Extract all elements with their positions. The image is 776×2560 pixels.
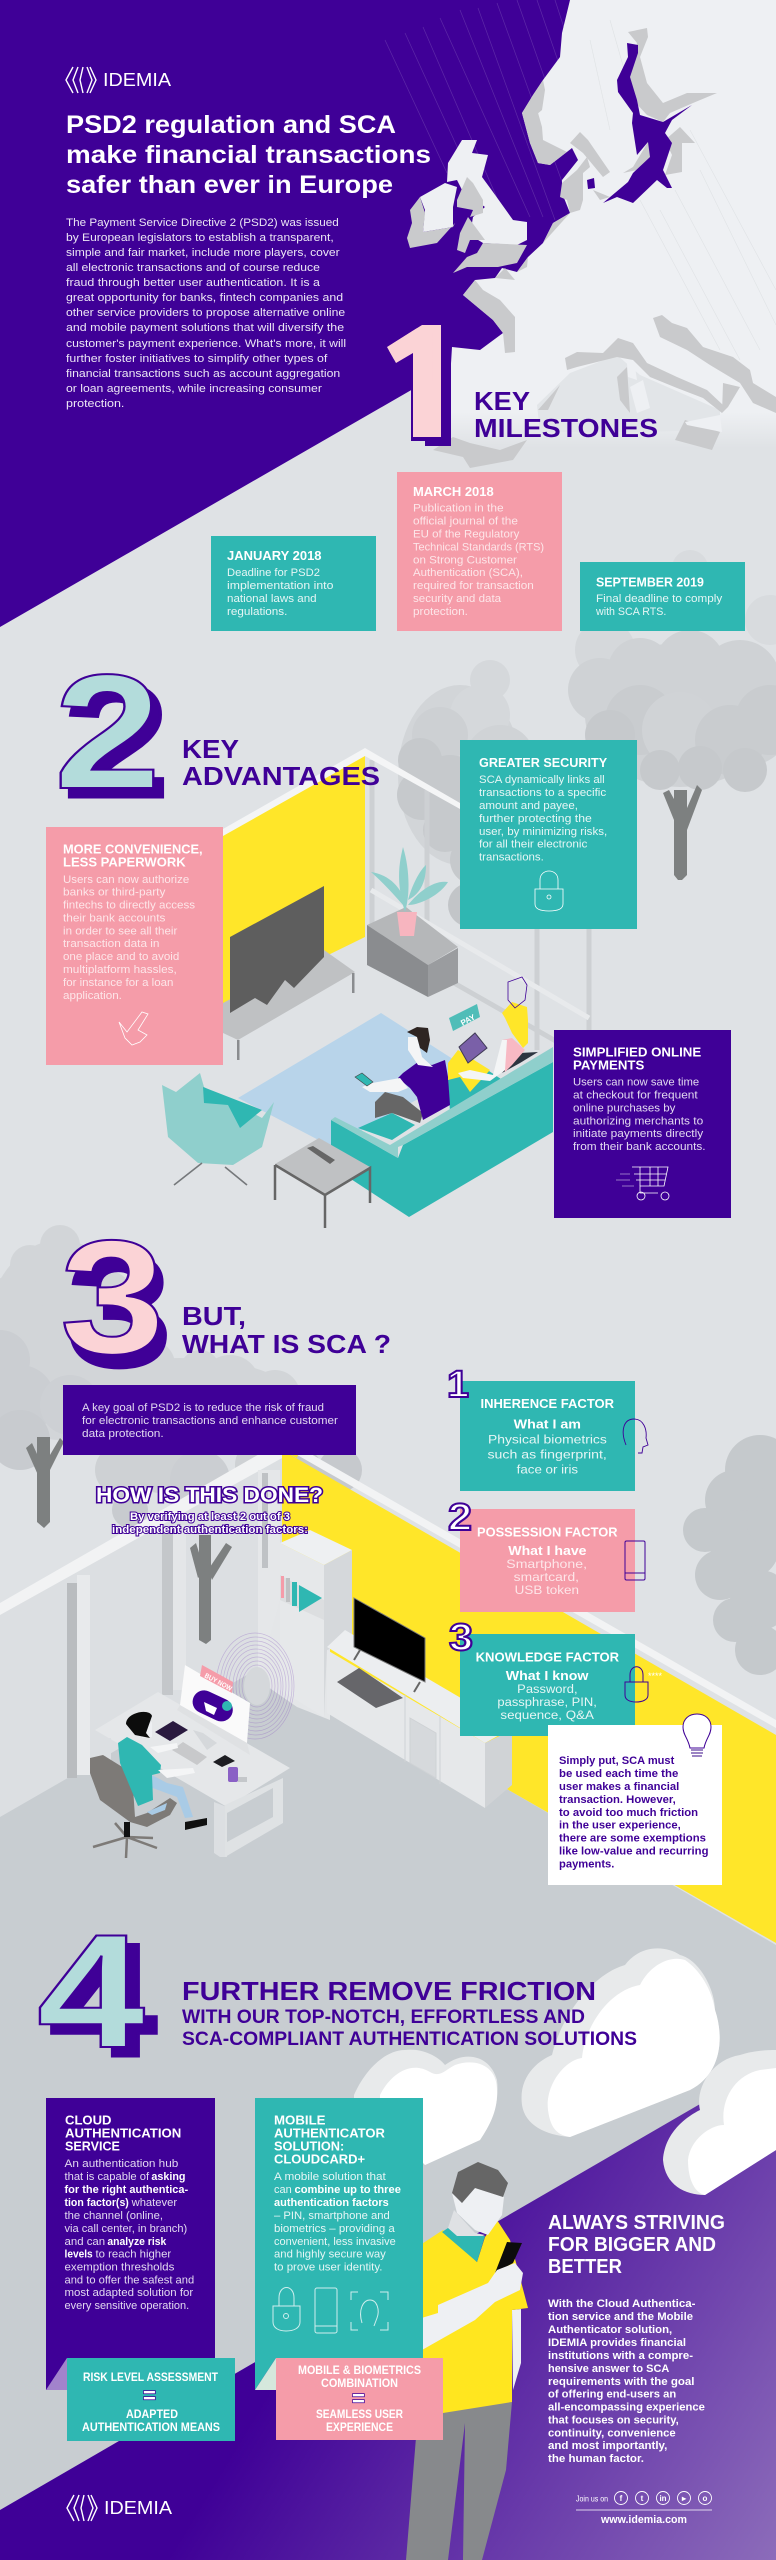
card: inherence factor xyxy=(447,1364,648,1491)
purple header background xyxy=(0,0,600,627)
intro text: further foster initiatives to simplify other types of xyxy=(66,353,328,365)
buy now tag: BUY NOW xyxy=(203,1673,233,1693)
card: september 2019: with SCA RTS. xyxy=(595,606,666,618)
card: simplified online payments: at checkout for frequent xyxy=(573,1090,698,1102)
illustration: living room xyxy=(162,748,589,1228)
icon: hand xyxy=(119,1012,148,1045)
card: january 2018: regulations. xyxy=(227,606,287,618)
heading: but what is SCA xyxy=(182,1301,391,1359)
person with phone xyxy=(400,2162,528,2560)
card: cloud authentication service: and to offer the safest and xyxy=(64,2274,194,2286)
box: mobile and biometrics: SEAMLESS USER xyxy=(316,2407,403,2421)
man at desk xyxy=(90,1712,207,1858)
heading: always striving: FOR BIGGER AND xyxy=(548,2233,716,2256)
card: march 2018: Authentication (SCA), xyxy=(413,567,523,579)
trees behind key advantages xyxy=(397,550,776,927)
section number 4: 4 xyxy=(49,1910,157,2091)
card: greater security xyxy=(460,740,637,929)
man on sofa xyxy=(355,1027,450,1123)
basket badge xyxy=(189,1687,237,1725)
shelf unit xyxy=(258,1530,352,1720)
card: simplified online payments: Users can now save time xyxy=(573,1076,699,1088)
title: make financial transactions xyxy=(66,141,431,169)
heading: key milestones: KEY xyxy=(474,386,530,416)
rug xyxy=(238,1013,470,1147)
card: january 2018: national laws and xyxy=(227,593,317,605)
heading: key milestones xyxy=(474,386,658,443)
side table xyxy=(275,1138,370,1228)
intro text: protection. xyxy=(66,398,124,410)
card: simplified online payments: initiate payments directly xyxy=(573,1128,704,1140)
card: greater security: SCA dynamically links all xyxy=(479,774,605,786)
box: mobile and biometrics: = xyxy=(352,2386,365,2411)
social links: www.idemia.com xyxy=(600,2514,687,2526)
closing text: and most importantly, xyxy=(548,2440,667,2452)
floor xyxy=(0,1657,776,2560)
card: more convenience: LESS PAPERWORK xyxy=(63,856,186,870)
text box: key goal: A key goal of PSD2 is to reduce the risk of fraud xyxy=(82,1402,324,1414)
icon: light bulb xyxy=(683,1714,711,1756)
card: inherence factor: face or iris xyxy=(517,1462,578,1476)
intro text: all electronic transactions and of course reduce xyxy=(66,262,320,274)
card: simplified online payments: online purchases by xyxy=(573,1102,676,1114)
card: cloud authentication service: CLOUD xyxy=(65,2114,112,2128)
card: march 2018 xyxy=(397,472,562,631)
social links: f xyxy=(620,2494,623,2503)
card: mobile authenticator solution: combine up to three xyxy=(294,2184,401,2196)
heading: but what is SCA: BUT, xyxy=(182,1301,246,1331)
yellow wall xyxy=(282,1450,776,1943)
woman on sofa xyxy=(448,1002,538,1092)
card: more convenience: banks or third-party xyxy=(63,887,166,899)
text box: key goal: for electronic transactions and enhance customer xyxy=(82,1415,338,1427)
card: january 2018 xyxy=(211,536,376,631)
card: knowledge factor: Password, xyxy=(517,1682,578,1696)
callout: simply put: Simply put, SCA must xyxy=(559,1755,675,1767)
callout: simply put: there are some exemptions xyxy=(559,1832,706,1844)
card: more convenience: multiplatform hassles, xyxy=(63,964,177,976)
heading: further remove friction xyxy=(182,1976,637,2050)
heading: how is this done: HOW IS THIS DONE? xyxy=(96,1484,323,1507)
card: cloud authentication service: An authentication hub xyxy=(64,2158,178,2170)
tv xyxy=(230,886,324,1013)
box: mobile and biometrics xyxy=(276,2358,443,2440)
card: cloud authentication service: AUTHENTICATION xyxy=(65,2126,181,2140)
card: cloud authentication service: tion factor(s) xyxy=(64,2197,129,2209)
text box: key goal xyxy=(63,1385,356,1455)
card: cloud authentication service: levels xyxy=(64,2248,93,2260)
intro text: or loan agreements, while increasing consumer xyxy=(66,383,322,395)
card: greater security: for all their electronic xyxy=(479,838,588,850)
closing text: all-encompassing experience xyxy=(548,2402,705,2414)
digit 1: 1 xyxy=(447,1364,469,1406)
icon: phone xyxy=(625,1541,645,1580)
intro text xyxy=(66,217,346,410)
icon: padlock with stars: **** xyxy=(648,1671,663,1681)
intro text: simple and fair market, include more players, cover xyxy=(66,247,340,259)
social links: t xyxy=(641,2494,644,2503)
card: knowledge factor: KNOWLEDGE FACTOR xyxy=(476,1650,619,1664)
card: cloud authentication service: SERVICE xyxy=(65,2140,120,2154)
card: more convenience: MORE CONVENIENCE, xyxy=(63,843,203,857)
card: mobile authenticator solution: A mobile solution that xyxy=(274,2171,386,2183)
digit 2: 2 xyxy=(448,1497,472,1539)
icons: lock, phone, face xyxy=(273,2288,388,2333)
heading: always striving: BETTER xyxy=(548,2255,622,2278)
heading: key advantages: KEY xyxy=(182,734,239,764)
card: january 2018: Deadline for PSD2 xyxy=(227,567,320,579)
card: more convenience: in order to see all their xyxy=(63,926,178,938)
card: simplified online payments xyxy=(554,1030,731,1218)
card: cloud authentication service: most adapted solution for xyxy=(64,2287,194,2299)
card: more convenience xyxy=(46,827,223,1065)
closing text: continuity, convenience xyxy=(548,2428,676,2440)
callout: simply put: to avoid too much friction xyxy=(559,1807,698,1819)
card: cloud authentication service: to reach higher xyxy=(96,2248,172,2260)
cabinet and plant xyxy=(367,847,458,997)
card: mobile authenticator solution: biometrics – providing a xyxy=(274,2223,395,2235)
closing text: tion service and the Mobile xyxy=(548,2311,693,2323)
intro text: The Payment Service Directive 2 (PSD2) was issued xyxy=(66,217,339,229)
heading: key advantages xyxy=(182,734,380,791)
heading: but what is SCA: WHAT IS SCA ? xyxy=(182,1329,391,1359)
callout: simply put: transaction. However, xyxy=(559,1794,676,1806)
callout: simply put: in the user experience, xyxy=(559,1820,681,1832)
card: simplified online payments: authorizing merchants to xyxy=(573,1116,703,1128)
title: PSD2 regulation and SCA xyxy=(66,111,396,139)
card: inherence factor: INHERENCE FACTOR xyxy=(480,1397,614,1411)
card: cloud authentication service: every sensitive operation. xyxy=(64,2300,189,2312)
card: january 2018: implementation into xyxy=(227,580,333,592)
social links: ▸ xyxy=(681,2494,687,2503)
card: september 2019: SEPTEMBER 2019 xyxy=(596,575,704,589)
section number 3: 3 xyxy=(60,1207,165,1388)
heading: key milestones: MILESTONES xyxy=(474,413,658,443)
card: more convenience: fintechs to directly access xyxy=(63,900,196,912)
card: march 2018: protection. xyxy=(413,606,468,618)
intro text: other service providers to propose alternative online xyxy=(66,307,345,319)
card: cloud authentication service: via call center, in branch) xyxy=(64,2223,187,2235)
title: safer than ever in Europe xyxy=(66,171,393,199)
card: cloud authentication service: asking xyxy=(151,2171,186,2183)
card: cloud authentication service xyxy=(46,2098,215,2390)
icon: padlock with stars xyxy=(625,1667,663,1702)
card: greater security: GREATER SECURITY xyxy=(479,756,608,770)
callout: simply put: payments. xyxy=(559,1858,614,1870)
buy now tag xyxy=(200,1665,233,1693)
card: greater security: user, by minimizing risks, xyxy=(479,826,607,838)
card: knowledge factor: passphrase, PIN, xyxy=(497,1695,597,1709)
card: cloud authentication service: the channel (online, xyxy=(64,2210,163,2222)
heading: how is this done: By verifying at least 2 out of 3 xyxy=(130,1511,290,1523)
card: greater security: amount and payee, xyxy=(479,800,578,812)
card: possession factor: POSSESSION FACTOR xyxy=(477,1526,618,1540)
armchair xyxy=(162,1073,274,1185)
heading: how is this done xyxy=(96,1484,323,1536)
card: mobile authenticator solution: SOLUTION: xyxy=(274,2140,344,2154)
desk xyxy=(95,1665,290,1857)
pay tag xyxy=(449,1004,480,1031)
card: mobile authenticator solution: convenient, less invasive xyxy=(274,2236,396,2248)
card: cloud authentication service: for the right authentica- xyxy=(64,2184,189,2196)
closing text: IDEMIA provides financial xyxy=(548,2337,686,2349)
section number 1 xyxy=(387,325,451,446)
digit 3: 3 xyxy=(449,1617,473,1659)
logo: IDEMIA top: IDEMIA xyxy=(103,70,171,90)
social links: in xyxy=(659,2494,667,2503)
intro text: great opportunity for banks, fintech companies and xyxy=(66,292,343,304)
right trees xyxy=(683,1435,776,1675)
card: cloud authentication service: analyze risk xyxy=(107,2236,167,2248)
card: mobile authenticator solution: AUTHENTICATOR xyxy=(274,2126,385,2140)
intro text: by European legislators to establish a transparent, xyxy=(66,232,334,244)
illustration: office room xyxy=(0,1364,776,2560)
closing text: requirements with the goal xyxy=(548,2376,694,2388)
logo: IDEMIA bottom: IDEMIA xyxy=(104,2498,172,2518)
card: simplified online payments: PAYMENTS xyxy=(573,1059,644,1073)
card: march 2018: official journal of the xyxy=(413,516,518,528)
med sea tint xyxy=(537,355,720,432)
card: knowledge factor xyxy=(449,1617,635,1736)
card: more convenience: one place and to avoid xyxy=(63,951,179,963)
monitor xyxy=(177,1705,250,1755)
closing text: institutions with a compre- xyxy=(548,2350,693,2362)
section number 4: 4 xyxy=(37,1901,145,2082)
card: possession factor: USB token xyxy=(515,1583,579,1597)
text box: key goal: data protection. xyxy=(82,1428,164,1440)
card: march 2018: Publication in the xyxy=(413,502,504,514)
card: more convenience: transaction data in xyxy=(63,938,160,950)
card: march 2018: on Strong Customer xyxy=(413,554,517,566)
intro text: fraud through better user authentication. It is a xyxy=(66,277,321,289)
card: mobile authenticator solution: can xyxy=(274,2184,292,2196)
tv bench xyxy=(223,950,355,1060)
window frames and tree xyxy=(67,1470,280,1778)
section number 1: 1 xyxy=(378,295,466,471)
box: risk level assessment xyxy=(67,2358,235,2441)
box: risk level assessment: ADAPTED xyxy=(126,2407,178,2421)
card: cloud authentication service: that is capable of xyxy=(64,2171,150,2183)
card: inherence factor: Physical biometrics xyxy=(488,1432,607,1446)
tv xyxy=(354,1598,425,1692)
card: simplified online payments: SIMPLIFIED ONLINE xyxy=(573,1046,701,1060)
left wall xyxy=(0,1445,282,1817)
card: march 2018: EU of the Regulatory xyxy=(413,528,520,540)
card: knowledge factor: sequence, Q&A xyxy=(500,1708,595,1722)
closing text: With the Cloud Authentica- xyxy=(548,2298,696,2310)
box: mobile and biometrics: MOBILE & BIOMETRICS xyxy=(298,2363,421,2377)
social links xyxy=(576,2492,712,2526)
closing text: of offering end-users an xyxy=(548,2388,676,2400)
closing text: Authenticator solution, xyxy=(548,2324,672,2336)
card: mobile authenticator solution: MOBILE xyxy=(274,2114,326,2128)
shield icon xyxy=(508,977,527,1008)
card: march 2018: Technical Standards (RTS) xyxy=(413,542,544,554)
icon: shopping cart xyxy=(616,1167,669,1200)
closing text: hensive answer to SCA xyxy=(548,2363,670,2375)
sofa xyxy=(331,1047,553,1217)
social links: Join us on xyxy=(576,2494,608,2504)
heading: further remove friction: WITH OUR TOP-NOTCH, EFFORTLESS AND xyxy=(182,2007,585,2028)
callout: simply put: like low-value and recurring xyxy=(559,1846,708,1858)
books xyxy=(281,1576,322,1612)
card: cloud authentication service: and can xyxy=(64,2236,105,2248)
closing text xyxy=(548,2298,705,2465)
card: mobile authenticator solution: to prove user identity. xyxy=(274,2262,382,2274)
clouds xyxy=(354,1948,776,2195)
card: possession factor: smartcard, xyxy=(514,1570,579,1584)
pay tag: PAY xyxy=(459,1012,477,1028)
box: risk level assessment: RISK LEVEL ASSESSMENT xyxy=(83,2370,219,2384)
card: greater security: further protecting the xyxy=(479,813,592,825)
card: march 2018: required for transaction xyxy=(413,580,534,592)
closing text: the human factor. xyxy=(548,2453,644,2465)
card: march 2018: MARCH 2018 xyxy=(413,485,494,499)
heading: how is this done: independent authentication factors: xyxy=(112,1524,308,1536)
card: more convenience: their bank accounts xyxy=(63,912,166,924)
card: simplified online payments: from their bank accounts. xyxy=(573,1141,706,1153)
purple footer background xyxy=(0,2060,776,2560)
card: more convenience: for instance for a loan xyxy=(63,977,173,989)
set-top box xyxy=(337,1668,403,1708)
closing text: that focuses on security, xyxy=(548,2414,679,2426)
card: september 2019 xyxy=(580,562,745,631)
callout: simply put: user makes a financial xyxy=(559,1781,679,1793)
fingerprint xyxy=(216,1633,294,1739)
card: greater security: transactions. xyxy=(479,852,544,864)
trees behind section 3 xyxy=(0,1225,362,1528)
heading: further remove friction: SCA-COMPLIANT AUTHENTICATION SOLUTIONS xyxy=(182,2029,637,2050)
card: mobile authenticator solution: – PIN, smartphone and xyxy=(274,2210,390,2222)
icon: head xyxy=(623,1419,648,1453)
card: september 2019: Final deadline to comply xyxy=(596,593,723,605)
heading: always striving: ALWAYS STRIVING xyxy=(548,2211,725,2234)
card: mobile authenticator solution: authentication factors xyxy=(274,2197,389,2209)
card: knowledge factor: What I know xyxy=(506,1668,589,1683)
title xyxy=(66,111,431,199)
intro text: financial transactions such as account aggregation xyxy=(66,368,340,380)
section number 3: 3 xyxy=(67,1220,172,1401)
logo: IDEMIA top xyxy=(66,67,171,93)
box: risk level assessment: = xyxy=(143,2383,156,2408)
intro text: customer's payment experience. What's more, it will xyxy=(66,338,346,350)
box: risk level assessment: AUTHENTICATION MEANS xyxy=(82,2420,220,2434)
card: january 2018: JANUARY 2018 xyxy=(227,549,322,563)
card: march 2018: security and data xyxy=(413,593,501,605)
callout: simply put xyxy=(548,1714,722,1885)
icon: padlock xyxy=(535,871,563,911)
section number 2: 2 xyxy=(63,649,170,832)
card: possession factor xyxy=(448,1497,645,1612)
card: cloud authentication service: exemption thresholds xyxy=(64,2262,175,2274)
box: mobile and biometrics: COMBINATION xyxy=(321,2376,398,2390)
callout: simply put: be used each time the xyxy=(559,1768,678,1780)
card: more convenience: Users can now authorize xyxy=(63,874,189,886)
social links: o xyxy=(703,2494,708,2503)
section number 2: 2 xyxy=(54,640,161,823)
card: inherence factor: What I am xyxy=(514,1416,581,1432)
card: mobile authenticator solution: CLOUDCARD+ xyxy=(274,2152,365,2166)
heading: further remove friction: FURTHER REMOVE FRICTION xyxy=(182,1976,596,2006)
heading: always striving xyxy=(548,2211,725,2278)
card: mobile authenticator solution: and highly secure way xyxy=(274,2248,386,2260)
yellow wall xyxy=(223,753,365,1025)
logo: IDEMIA bottom xyxy=(67,2495,172,2521)
card: possession factor: What I have xyxy=(508,1543,586,1558)
intro text: and mobile payment solutions that will diversify the xyxy=(66,322,344,334)
keyboard, tablet, phone, cup xyxy=(155,1721,247,1782)
card: inherence factor: such as fingerprint, xyxy=(488,1448,607,1462)
heading: key advantages: ADVANTAGES xyxy=(182,761,380,791)
card: possession factor: Smartphone, xyxy=(506,1557,587,1571)
card: cloud authentication service: whatever xyxy=(131,2197,178,2209)
low cabinet xyxy=(327,1598,512,1808)
box: mobile and biometrics: EXPERIENCE xyxy=(326,2420,393,2434)
card: more convenience: application. xyxy=(63,990,122,1002)
map of Europe xyxy=(407,0,776,470)
card: greater security: transactions to a specific xyxy=(479,787,607,799)
window frame xyxy=(371,760,589,1060)
card: mobile authenticator solution xyxy=(255,2098,423,2390)
